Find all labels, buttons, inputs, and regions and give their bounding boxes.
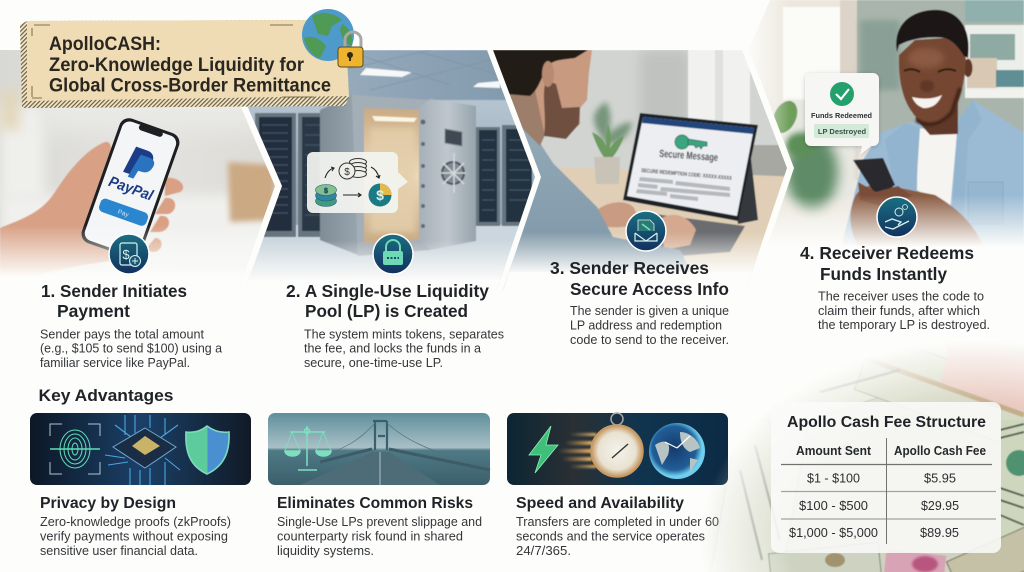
PayPal logo: PayPal	[106, 173, 156, 205]
Privacy by Design text: sensitive user financial data.	[40, 544, 198, 558]
panel: step 1 photo	[0, 50, 280, 292]
step 1 text: Sender pays the total amount	[40, 328, 205, 342]
step 3 heading: 3. Sender Receives	[550, 258, 709, 278]
step 4 text: the temporary LP is destroyed.	[818, 318, 990, 332]
Pay button	[99, 198, 148, 226]
table rows: $29.95	[921, 499, 959, 513]
hand holding phone	[0, 142, 183, 285]
PayPal logo	[108, 146, 155, 200]
plant	[592, 102, 632, 184]
Speed and Availability text: 24/7/365.	[516, 544, 571, 558]
step 2 text	[304, 328, 504, 370]
table header: Amount Sent	[796, 444, 872, 458]
icon: lightning	[529, 426, 558, 473]
speed streaks	[558, 433, 596, 468]
step 4 heading: 4. Receiver Redeems	[800, 243, 974, 263]
step 3 text: code to send to the receiver.	[570, 333, 729, 347]
step 2 text: The system mints tokens, separates	[304, 328, 504, 342]
icon: envelope	[626, 211, 666, 251]
white t-shirt	[917, 128, 957, 212]
icon: globe with padlock	[302, 9, 363, 67]
table rows: $89.95	[920, 526, 959, 540]
table grid	[781, 438, 996, 544]
Privacy by Design text: Privacy by Design	[40, 495, 176, 512]
step 2 text: the fee, and locks the funds in a	[304, 342, 481, 356]
icon: padlock	[373, 234, 413, 274]
panel: step 3 photo	[490, 50, 800, 292]
message placeholder lines	[636, 177, 730, 201]
icon: coin stack source: $	[324, 188, 328, 195]
step 2 heading: 2. A Single-Use Liquidity	[286, 281, 489, 301]
Speed and Availability text: Transfers are completed in under 60	[516, 515, 719, 529]
ceiling lights	[360, 68, 413, 77]
table header: Apollo Cash Fee	[894, 444, 986, 458]
Privacy by Design text: verify payments without exposing	[40, 530, 228, 544]
icon: wallet with plus	[109, 234, 149, 274]
desk	[560, 167, 784, 290]
step 4 heading: Funds Instantly	[820, 264, 947, 284]
Pay button: Pay	[117, 208, 130, 219]
step 4 heading	[800, 243, 974, 284]
icon: shield	[186, 426, 229, 474]
right-hand banknote	[1000, 420, 1024, 540]
hands and phone	[850, 158, 985, 250]
plant	[768, 97, 838, 210]
title banner	[20, 20, 349, 108]
step 1 text: familiar service like PayPal.	[40, 356, 190, 370]
tablet with secure message	[623, 113, 758, 224]
table rows: $5.95	[924, 472, 956, 486]
panel: step 4 photo	[752, 0, 1024, 244]
table rows	[789, 472, 959, 540]
table header	[796, 444, 986, 458]
advantage image: privacy	[30, 413, 251, 485]
Speed and Availability text: seconds and the service operates	[516, 530, 705, 544]
Speed and Availability text	[516, 495, 719, 558]
Privacy by Design text	[40, 495, 231, 558]
title text: Global Cross-Border Remittance	[49, 74, 331, 96]
icon: wallet with plus: $	[122, 247, 130, 262]
icon: stopwatch	[591, 413, 643, 477]
step 3 text: The sender is given a unique	[570, 304, 729, 318]
vault	[320, 95, 476, 256]
Eliminates Common Risks text: Eliminates Common Risks	[277, 495, 473, 512]
icon: check mark	[830, 82, 854, 106]
step 4 text: The receiver uses the code to	[818, 290, 984, 304]
sender: jacket	[503, 128, 689, 290]
Eliminates Common Risks text: Single-Use LPs prevent slippage and	[277, 515, 482, 529]
icon: key	[675, 135, 707, 149]
step 1 text: (e.g., $105 to send $100) using a	[40, 342, 222, 356]
table rows: $1,000 - $5,000	[789, 526, 878, 540]
LP Destroyed badge: LP Destroyed	[818, 127, 867, 136]
step 1 text	[40, 328, 222, 370]
cardboard box	[228, 162, 275, 222]
Privacy by Design text: Zero-knowledge proofs (zkProofs)	[40, 515, 231, 529]
receiver: head and smile	[896, 10, 972, 135]
background shelves	[857, 0, 1024, 135]
money background	[706, 348, 1024, 572]
title text: ApolloCASH:	[49, 33, 161, 55]
circuit traces	[105, 415, 180, 485]
Secure Message text: Secure Message	[659, 148, 719, 164]
table rows: $100 - $500	[799, 499, 868, 513]
window	[688, 50, 750, 125]
advantage image: risks	[268, 413, 490, 485]
table title: Apollo Cash Fee Structure	[787, 414, 986, 431]
step 3 heading	[550, 258, 729, 299]
step 2 heading: Pool (LP) is Created	[305, 301, 468, 321]
step 1 heading	[41, 281, 187, 321]
step 1 heading: Payment	[57, 301, 130, 321]
arrows between coins	[325, 167, 380, 197]
advantage image: speed	[507, 413, 728, 485]
Eliminates Common Risks text: counterparty risk found in shared	[277, 530, 463, 544]
receiver: shirt	[844, 100, 1024, 242]
icon: fingerprint	[50, 424, 100, 474]
step 2 heading	[286, 281, 489, 321]
icon: scales	[285, 426, 331, 470]
icon: coins: $	[344, 167, 350, 178]
fee structure table card	[771, 402, 1001, 553]
phone with PayPal app	[82, 118, 180, 250]
Funds Redeemed label: Funds Redeemed	[811, 111, 872, 120]
step 3 text	[570, 304, 729, 347]
title text	[49, 33, 331, 96]
icon: chip	[113, 428, 176, 468]
lower banknotes	[768, 552, 882, 572]
icon: hand receiving coin	[877, 197, 917, 237]
bridge	[300, 421, 490, 485]
Speed and Availability text: Speed and Availability	[516, 495, 684, 512]
sender: head and beard	[490, 50, 592, 146]
panel: step 2 photo	[245, 50, 535, 290]
Eliminates Common Risks text: liquidity systems.	[277, 544, 374, 558]
icon: locked dollar coin: $	[376, 187, 384, 203]
step 4 text	[818, 290, 990, 332]
redemption code: SECURE REDEMPTION CODE: XXXXX-XXXXX	[641, 168, 732, 182]
server racks	[255, 113, 532, 237]
step 3 heading: Secure Access Info	[570, 279, 729, 299]
Key Advantages heading: Key Advantages	[38, 386, 174, 405]
keyboard and hands	[597, 202, 745, 256]
step 1 heading: 1. Sender Initiates	[41, 281, 187, 301]
table rows: $1 - $100	[807, 472, 860, 486]
title text: Zero-Knowledge Liquidity for	[49, 54, 304, 76]
Eliminates Common Risks text	[277, 495, 482, 558]
callout: funds redeemed	[805, 73, 879, 155]
callout: mint and lock flow	[307, 152, 408, 213]
icon: globe clock	[649, 423, 705, 479]
step 4 text: claim their funds, after which	[818, 304, 980, 318]
step 3 text: LP address and redemption	[570, 318, 722, 332]
step 2 text: secure, one-time-use LP.	[304, 356, 443, 370]
padlock	[338, 32, 363, 67]
